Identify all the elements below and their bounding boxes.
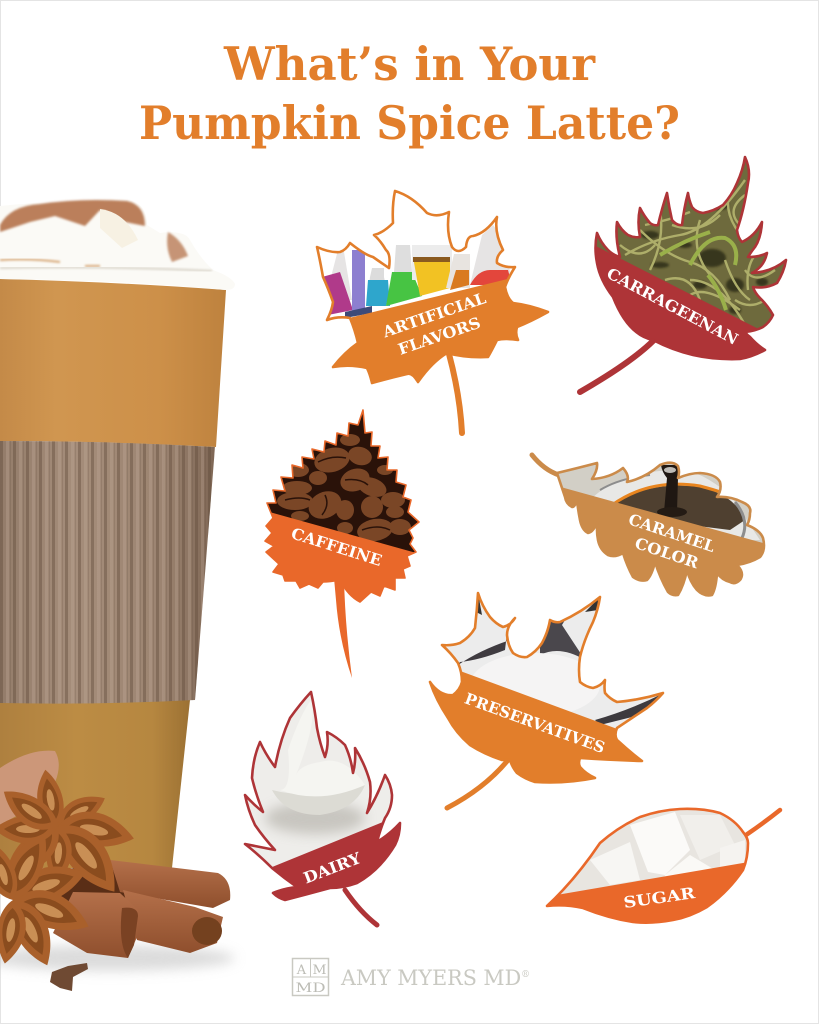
photo: seaweed [596,162,784,358]
logo mark [292,958,328,996]
coffee cup [0,199,235,868]
stem [345,890,377,925]
photo: milk splash [248,695,398,899]
label: PRESERVATIVES [462,689,608,757]
band [266,512,414,601]
title: What’s in Your [223,37,596,91]
label: COLOR [632,533,701,572]
stem [449,354,462,433]
photo: coffee beans [266,414,418,601]
photo: lab flasks [324,225,545,382]
photo: caramel drip [558,464,763,594]
whipped cream and lid rim [0,199,235,290]
star anise lower [0,825,95,972]
band [434,672,638,782]
cup sleeve [0,441,215,704]
blurred cinnamon stick [0,751,59,825]
stem [334,578,352,678]
spices [0,751,235,991]
logo: Amy Myers MD [292,958,530,996]
leaf: artificial flavors [316,190,550,436]
logo mark: A [296,963,307,978]
leaf: carrageenan [580,150,790,392]
photo: white powder [434,600,659,782]
wordmark: ® [521,970,530,980]
band [596,246,762,358]
cinnamon stick back [110,860,230,908]
title [139,37,680,150]
cinnamon stick front [123,890,223,953]
shadow [0,945,235,971]
leaf: sugar [545,805,780,930]
photo: sugar cubes [550,810,747,922]
leaf: dairy [240,690,405,925]
title: Pumpkin Spice Latte? [139,96,680,150]
logo mark: M [312,963,326,978]
band [550,862,744,922]
leaf: caffeine [255,405,425,678]
cinnamon underlay [40,865,140,930]
clove [50,963,88,991]
stem [532,455,559,475]
label: FLAVORS [395,313,483,359]
label: CARRAGEENAN [604,263,741,349]
leaf: preservatives [425,590,670,808]
stem [746,810,780,835]
leaf: caramel color [532,455,770,610]
cinnamon stick short [53,892,138,958]
cup upper body [0,279,226,447]
label: CARAMEL [626,509,718,556]
cup lower body [0,700,190,868]
label: DAIRY [301,848,364,887]
band [272,822,398,899]
star anise upper [0,768,138,903]
band [336,279,545,382]
label: ARTIFICIAL [379,288,488,342]
stem [447,760,508,808]
label: SUGAR [622,883,696,912]
wordmark: AMY MYERS MD [341,966,524,990]
label: CAFFEINE [289,524,385,570]
logo mark: MD [296,981,326,996]
stem [580,340,654,392]
band [563,488,763,594]
